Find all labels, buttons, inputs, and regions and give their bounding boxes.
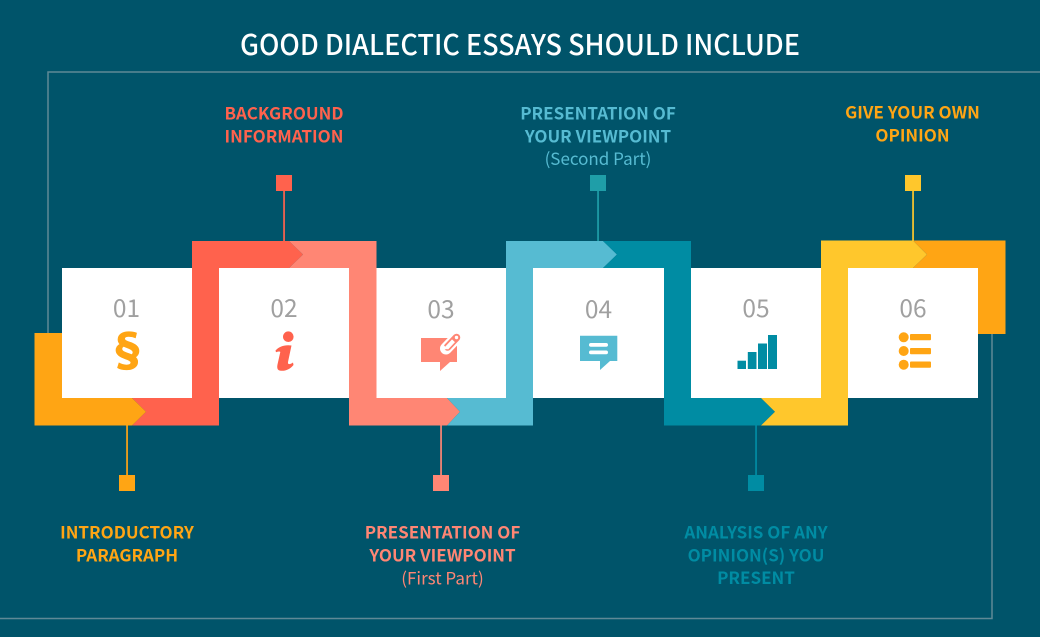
ribbon segment: light blue (447, 241, 617, 426)
card 01 (62, 268, 192, 398)
number 03: 03 (427, 291, 455, 326)
icon: speech bubble with pencil (421, 336, 458, 371)
number 05: 05 (742, 290, 770, 325)
card 04 (533, 268, 664, 398)
step 06 label group: OPINION (875, 122, 950, 146)
step 05 label group: PRESENT (717, 564, 795, 589)
number 06: 06 (899, 290, 927, 325)
ribbon segment: salmon (289, 241, 460, 426)
icon: section sign: § (106, 317, 149, 379)
step 04 label group: (Second Part) (545, 145, 651, 170)
step 05 label group: OPINION(S) YOU (688, 542, 824, 566)
card 03 (376, 268, 506, 398)
number 04: 04 (585, 291, 612, 326)
ribbon segment: yellow (761, 240, 927, 426)
ribbon segment: start orange (34, 333, 146, 426)
icon: list (899, 332, 931, 370)
step 03 label group (365, 426, 520, 590)
ribbon segment: teal (603, 241, 775, 426)
card 06 (848, 268, 978, 398)
ribbon segment: red (132, 241, 303, 426)
number 01: 01 (113, 290, 140, 325)
step 06 label group: GIVE YOUR OWN (845, 98, 980, 124)
step 03 label group: (First Part) (401, 564, 484, 590)
icon: bar chart (738, 335, 777, 369)
title: GOOD DIALECTIC ESSAYS SHOULD INCLUDE (240, 23, 800, 64)
step 02 label group: BACKGROUND (224, 100, 344, 124)
number 02: 02 (270, 290, 298, 325)
step 02 label group (224, 100, 344, 241)
ribbon segment: top right orange (913, 240, 1006, 334)
step 06 label group (845, 98, 980, 241)
step 05 label group (683, 426, 828, 589)
step 03 label group: YOUR VIEWPOINT (368, 542, 516, 566)
step 02 label group: INFORMATION (225, 122, 343, 148)
step 04 label group: YOUR VIEWPOINT (524, 122, 672, 148)
step 01 label group: INTRODUCTORY (60, 518, 194, 544)
card 05 (691, 268, 821, 398)
step 04 label group: PRESENTATION OF (520, 100, 676, 124)
step 04 label group (520, 100, 676, 241)
step 01 label group: PARAGRAPH (76, 542, 178, 566)
step 05 label group: ANALYSIS OF ANY (683, 518, 828, 544)
icon: info (276, 331, 294, 371)
card 02 (219, 268, 349, 398)
icon: speech bubble with lines (580, 336, 617, 370)
step 01 label group (60, 426, 194, 566)
step 03 label group: PRESENTATION OF (365, 518, 520, 544)
